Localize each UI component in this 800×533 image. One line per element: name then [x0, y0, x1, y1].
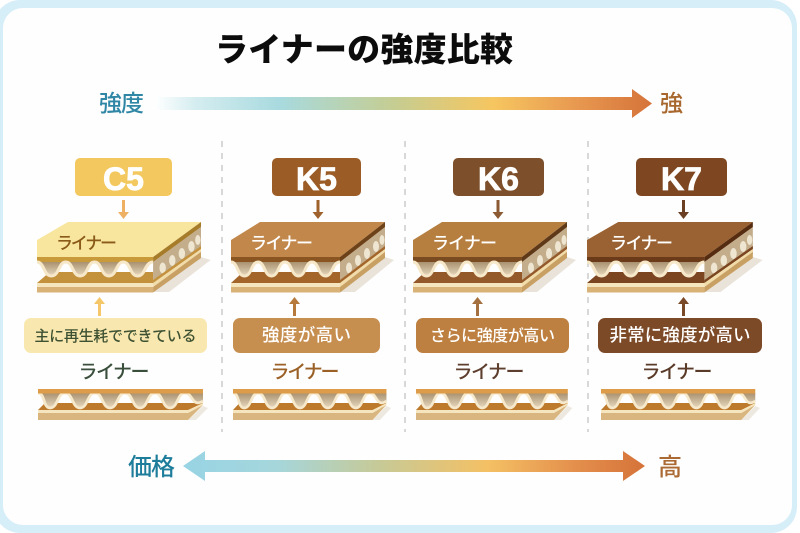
label: strong: 強 [660, 84, 683, 118]
board: lower flute [601, 389, 760, 420]
arrow: up [678, 297, 689, 316]
strength scale arrow [99, 84, 683, 118]
badge: K5 [272, 158, 361, 197]
pill: description: 非常に強度が高い [610, 322, 750, 347]
badge: K7 [636, 158, 727, 197]
panel: K5 [231, 158, 394, 420]
text: lower liner label: ライナー [454, 357, 524, 384]
badge: K6 [453, 158, 544, 197]
text: liner on board: ライナー [56, 229, 117, 254]
arrow: down [492, 200, 504, 219]
board: upper liner [413, 222, 576, 292]
label: high: 高 [658, 447, 682, 482]
panel: K6 [413, 158, 576, 420]
arrow: down [312, 200, 324, 219]
board: lower flute [38, 389, 208, 420]
arrow: up [289, 297, 300, 316]
text: liner on board: ライナー [432, 229, 497, 254]
badge: K7: K7 [661, 161, 702, 197]
title: ライナーの強度比較 [215, 23, 513, 71]
arrow: up [472, 297, 483, 316]
badge: K6: K6 [478, 161, 519, 197]
badge: C5: C5 [103, 161, 144, 197]
pill: description: 主に再生耗でできている [34, 325, 196, 346]
dashed divider lines [222, 141, 588, 432]
pill: description: さらに強度が高い [430, 322, 555, 346]
text: lower liner label: ライナー [642, 357, 712, 384]
board: upper liner [37, 222, 211, 292]
price scale arrow [128, 447, 682, 482]
badge: C5 [75, 158, 172, 197]
text: lower liner label: ライナー [78, 357, 150, 384]
arrow: price gradient [183, 451, 645, 481]
panel: C5 [24, 158, 211, 420]
board: upper liner [231, 222, 394, 292]
text: lower liner label: ライナー [270, 357, 340, 384]
pill: description [598, 318, 762, 353]
pill: description [416, 318, 569, 353]
label: price: 価格 [128, 447, 175, 482]
text: liner on board: ライナー [610, 229, 673, 254]
pill: description [233, 318, 380, 353]
board: upper liner [587, 222, 763, 292]
arrow: up [94, 297, 105, 316]
label: strength: 強度 [99, 84, 144, 118]
pill: description: 強度が高い [262, 322, 351, 347]
arrow: strength gradient [155, 89, 652, 118]
board: lower flute [233, 389, 391, 420]
text: liner on board: ライナー [250, 229, 313, 254]
arrow: down [118, 200, 129, 219]
arrow: down [678, 200, 689, 219]
board: lower flute [416, 389, 572, 420]
panel: K7 [587, 158, 763, 420]
badge: K5: K5 [296, 161, 337, 197]
pill: description [24, 318, 207, 353]
